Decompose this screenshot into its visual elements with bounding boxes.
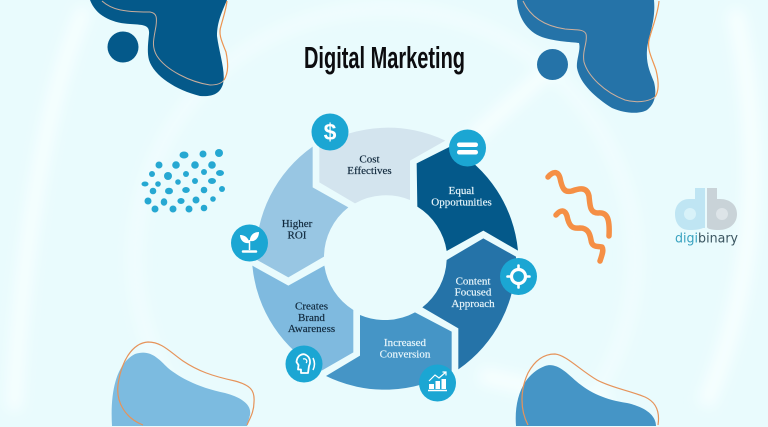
icon: head: [286, 346, 322, 382]
label: Increased Conversion: Increased: [384, 337, 426, 349]
decorative squiggles: [548, 173, 609, 261]
icon: dollar: [312, 114, 348, 150]
label: Content Focused Approach: Approach: [451, 298, 495, 310]
decorative blob: bottom right: [516, 354, 658, 426]
icon: dollar: $: [324, 119, 337, 145]
icon: chart: [419, 364, 456, 402]
label: Cost Effectives: Effectives: [347, 165, 392, 177]
icon: plant: [231, 224, 268, 262]
label: Equal Opportunities: Equal: [449, 185, 474, 197]
decorative blob: top right: [517, 0, 659, 113]
label: Higher ROI: ROI: [288, 229, 307, 241]
label: Content Focused Approach: Content: [456, 276, 490, 288]
logo: digibinary: digibinary: [675, 230, 738, 246]
label: Higher ROI: Higher: [282, 218, 312, 230]
label: Equal Opportunities: Opportunities: [431, 196, 492, 208]
label: Increased Conversion: Conversion: [380, 348, 431, 360]
segment labels: [282, 154, 495, 360]
label: Creates Brand Awareness: Creates: [295, 300, 328, 312]
decorative dot cluster: [142, 149, 225, 212]
segment: Cost Effectives: [319, 128, 445, 203]
decorative blob: bottom left: [112, 342, 254, 426]
logo: digibinary: [675, 188, 738, 246]
segment: Content Focused Approach: [422, 238, 516, 369]
segment: Equal Opportunities: [417, 147, 518, 251]
cycle diagram: [252, 128, 518, 390]
label: Content Focused Approach: Focused: [455, 286, 492, 298]
icon: equals: [449, 130, 486, 166]
label: Cost Effectives: Cost: [359, 154, 380, 166]
label: Creates Brand Awareness: Awareness: [288, 323, 335, 335]
decorative blob: top left: [90, 0, 228, 96]
icon: target: [500, 258, 537, 295]
segment: Higher ROI: [256, 147, 348, 277]
label: Creates Brand Awareness: Brand: [298, 312, 325, 324]
segment: Creates Brand Awareness: [252, 266, 353, 371]
title: Digital Marketing: [304, 40, 465, 75]
segment: Increased Conversion: [326, 312, 452, 390]
